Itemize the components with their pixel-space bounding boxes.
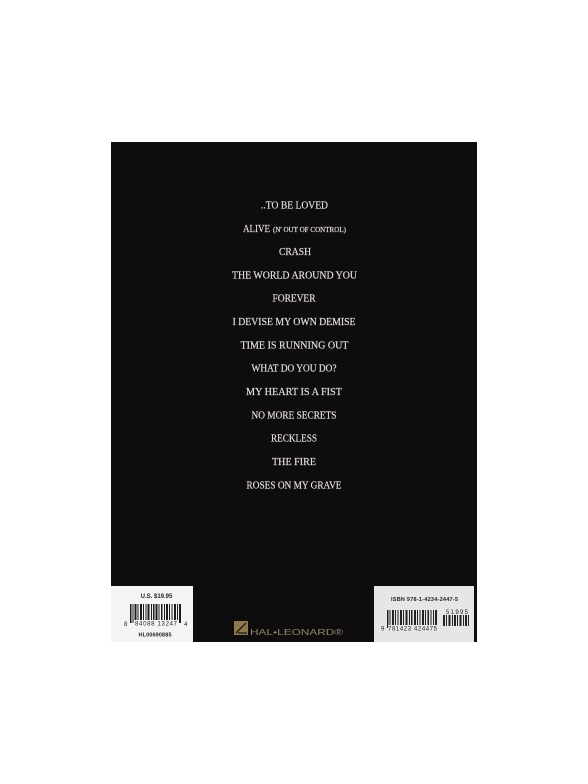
price barcode: [443, 615, 469, 626]
isbn barcode: [387, 610, 437, 628]
song title: reckless: RECKLESS: [271, 434, 317, 444]
isbn digits: [381, 625, 438, 632]
price digits: 51995: [446, 610, 469, 616]
song title: roses on my grave: ROSES ON MY GRAVE: [246, 480, 342, 492]
panel: black back cover: [111, 142, 477, 642]
song title: alive: (N' OUT OF CONTROL): [273, 226, 347, 234]
song title: time is running out: TIME IS RUNNING OUT: [240, 340, 349, 352]
panel: isbn barcode label: [374, 586, 474, 642]
isbn number: ISBN 978-1-4234-2447-5: [391, 597, 458, 603]
song title: no more secrets: NO MORE SECRETS: [252, 410, 337, 422]
icon: logo mark: [234, 621, 248, 635]
product code: HL00690885: [138, 632, 172, 638]
logo: hal leonard: [234, 621, 344, 637]
song title: the fire: THE FIRE: [272, 457, 316, 468]
song title: my heart is a fist: MY HEART IS A FIST: [246, 387, 343, 398]
isbn digits: 781423 424475: [388, 626, 438, 632]
price: U.S. $19.95: [141, 594, 173, 600]
song title: to be loved: ..TO BE LOVED: [261, 200, 328, 212]
isbn digits: 9: [381, 626, 385, 632]
barcode digits: 4: [184, 622, 188, 628]
logo wordmark: HAL•LEONARD®: [250, 627, 344, 637]
song list: [232, 200, 357, 492]
song title: alive: [243, 224, 347, 235]
barcode digits: [124, 620, 188, 628]
barcode digits: 8: [124, 622, 128, 628]
barcode: [130, 604, 181, 623]
song title: i devise my own demise: I DEVISE MY OWN DEMISE: [232, 317, 356, 328]
song title: what do you do: WHAT DO YOU DO?: [252, 364, 337, 374]
panel: price barcode label: [111, 586, 193, 642]
song title: alive: ALIVE: [243, 224, 270, 235]
song title: crash: CRASH: [279, 247, 311, 258]
barcode digits: 84088 13247: [135, 622, 178, 628]
song title: the world around you: THE WORLD AROUND YOU: [232, 270, 357, 282]
song title: forever: FOREVER: [272, 294, 316, 304]
